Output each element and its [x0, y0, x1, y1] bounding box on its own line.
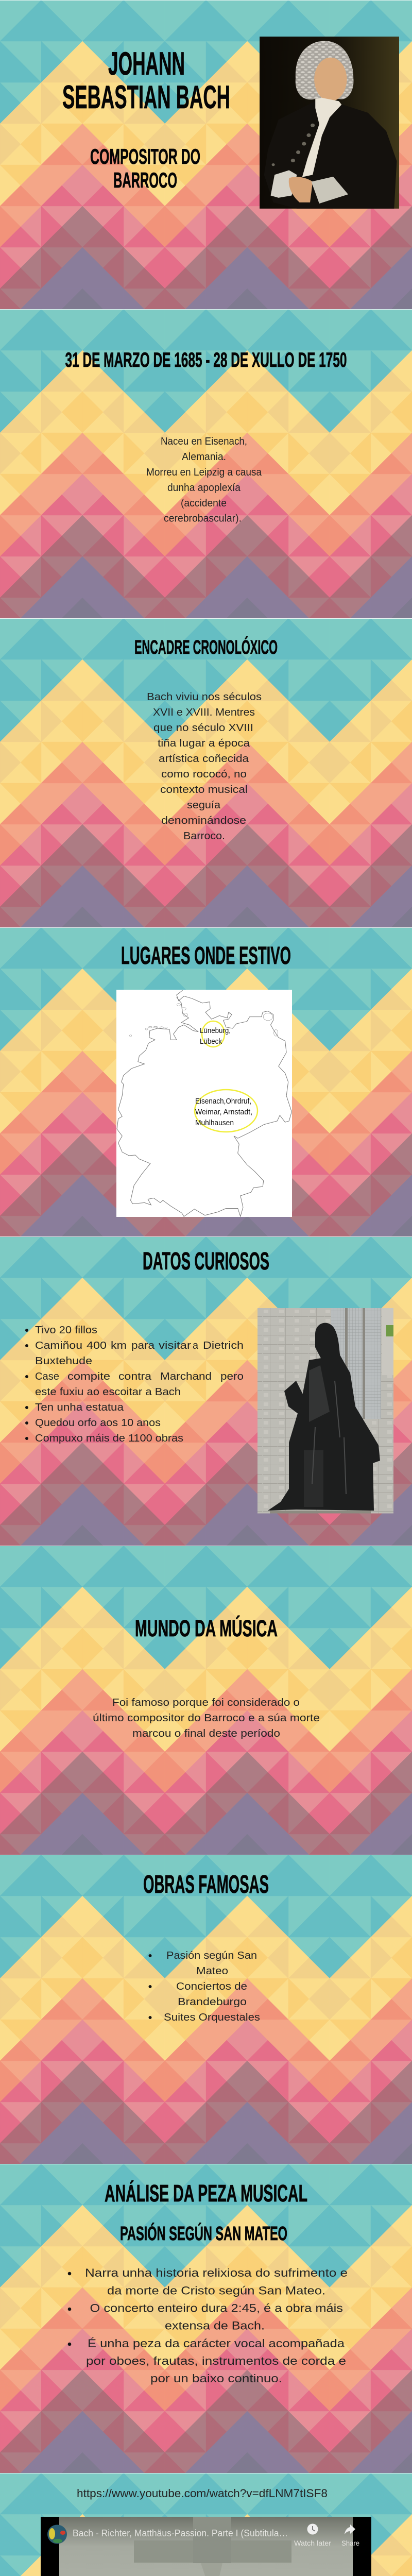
list: curious facts: km	[111, 1340, 127, 1351]
list: curious facts: Quedou orfo aos 10 anos	[35, 1417, 161, 1429]
list: famous works: Pasión según San	[166, 1950, 257, 1961]
list: analysis points: É unha peza da carácter vocal acompañada	[88, 2337, 345, 2350]
icon: share	[341, 2524, 359, 2547]
list: analysis points: extensa de Bach.	[165, 2319, 265, 2332]
list: famous works	[148, 1950, 260, 2023]
list: curious facts	[25, 1325, 244, 1444]
panel: analysis of the musical piece	[0, 2164, 412, 2473]
map of Germany: Lüneburg,	[200, 1026, 231, 1035]
icon: watch later	[294, 2523, 331, 2547]
text: birth and death: dunha apoplexía	[167, 482, 241, 494]
icon: watch later: Watch later	[294, 2539, 331, 2547]
text: chronological description: seguía	[187, 800, 221, 811]
text: birth and death: Naceu en Eisenach,	[161, 436, 247, 447]
icon: channel avatar	[47, 2524, 67, 2544]
video thumbnail	[41, 2517, 371, 2576]
heading: Johann Sebastian Bach: JOHANN	[108, 46, 185, 82]
text: chronological description: contexto musical	[160, 784, 248, 795]
list: analysis points: Narra unha historia relixiosa do sufrimento e	[85, 2266, 348, 2279]
list: curious facts: Case	[35, 1371, 59, 1382]
list: curious facts: compite	[67, 1371, 110, 1382]
list: curious facts: a	[193, 1340, 199, 1351]
panel: chronological framing	[0, 618, 412, 927]
list: curious facts: visitar	[159, 1340, 191, 1351]
map of Germany	[116, 990, 292, 1217]
list: analysis points: O concerto enteiro dura 2:45, é a obra máis	[90, 2302, 343, 2314]
list: curious facts: contra	[118, 1371, 152, 1382]
text: chronological description: tiña lugar a época	[158, 738, 250, 749]
subtitle: composer of the Baroque: COMPOSITOR DO	[90, 144, 200, 168]
text: birth and death: (accidente	[181, 498, 227, 509]
list: curious facts: Buxtehude	[35, 1355, 92, 1367]
text: video link: https://www.youtube.com/watch?v=dfLNM7tISF8	[77, 2487, 328, 2500]
list: curious facts: pero	[220, 1371, 244, 1382]
panel: world of music	[0, 1546, 412, 1855]
list: curious facts: este fuxiu ao escoitar a Bach	[35, 1386, 181, 1398]
map of Germany: Muhlhausen	[195, 1118, 234, 1127]
heading: Encadre cronolóxico: ENCADRE CRONOLÓXICO	[134, 636, 278, 658]
text: chronological description: Bach viviu nos séculos	[147, 691, 262, 703]
list: analysis points: por un baixo continuo.	[150, 2372, 282, 2385]
map of Germany: Eisenach,Ohrdruf,	[195, 1097, 251, 1106]
text: chronological description: artística coñecida	[159, 753, 249, 765]
list: curious facts: 400	[87, 1340, 107, 1351]
subtitle: composer of the Baroque: BARROCO	[113, 168, 177, 192]
list: curious facts: Ten unha estatua	[35, 1402, 124, 1413]
text: chronological description: XVII e XVIII. Mentres	[153, 707, 255, 718]
heading: Datos curiosos: DATOS CURIOSOS	[143, 1248, 269, 1275]
panel: famous works	[0, 1855, 412, 2164]
text: video title: Bach - Richter, Matthäus-Passion. Parte I (Subtitula…	[73, 2528, 288, 2538]
text: chronological description: Barroco.	[183, 831, 225, 842]
list: curious facts: para	[131, 1340, 155, 1351]
panel: title	[0, 0, 412, 309]
list: curious facts: Dietrich	[203, 1340, 244, 1351]
list: famous works: Conciertos de	[176, 1981, 247, 1992]
text: chronological description: como rococó, no	[161, 769, 247, 780]
map of Germany: Lübeck	[200, 1037, 222, 1046]
panel: dates	[0, 309, 412, 618]
heading: Obras famosas: OBRAS FAMOSAS	[143, 1871, 269, 1899]
list: analysis points: da morte de Cristo según San Mateo.	[107, 2284, 325, 2297]
panel: places he lived	[0, 927, 412, 1236]
icon: share: Share	[341, 2539, 359, 2547]
heading: Johann Sebastian Bach: SEBASTIAN BACH	[62, 79, 230, 115]
list: curious facts: Marchand	[160, 1371, 212, 1382]
text: birth and death	[146, 436, 262, 524]
subheading: Pasión según San Mateo: PASIÓN SEGÚN SAN MATEO	[120, 2222, 287, 2245]
text: last Baroque composer: marcou o final deste período	[132, 1728, 280, 1739]
panel: curious facts	[0, 1236, 412, 1546]
map of Germany: Weimar, Arnstadt,	[195, 1108, 252, 1116]
heading: Lugares onde estivo: LUGARES ONDE ESTIVO	[121, 942, 291, 970]
portrait of Bach	[260, 37, 399, 209]
text: birth and death: Morreu en Leipzig a causa	[146, 467, 262, 478]
list: analysis points: por oboes, frautas, instrumentos de corda e	[86, 2354, 346, 2367]
panel: Saint Matthew Passion video	[0, 2473, 412, 2576]
text: birth and death: Alemania.	[182, 451, 226, 463]
text: chronological description: que no século XVIII	[153, 722, 253, 734]
list: famous works: Mateo	[196, 1965, 228, 1977]
photo: statue of Bach	[258, 1308, 393, 1514]
heading: Mundo da música: MUNDO DA MÚSICA	[135, 1615, 278, 1641]
heading: Johann Sebastian Bach	[62, 46, 230, 115]
list: curious facts: Tivo 20 fillos	[35, 1325, 97, 1336]
text: last Baroque composer	[93, 1697, 320, 1739]
list: famous works: Brandeburgo	[178, 1996, 247, 2008]
text: birth and death: cerebrobascular).	[164, 513, 242, 524]
list: curious facts: Camiñou	[35, 1340, 82, 1351]
text: chronological description	[147, 691, 262, 842]
list: curious facts: Compuxo máis de 1100 obras	[35, 1433, 183, 1444]
list: famous works: Suites Orquestales	[164, 2012, 260, 2023]
list: analysis points	[68, 2266, 348, 2385]
text: chronological description: denominándose	[161, 815, 246, 826]
subtitle: composer of the Baroque	[90, 144, 200, 192]
text: last Baroque composer: Foi famoso porque foi considerado o	[112, 1697, 300, 1708]
text: last Baroque composer: último compositor do Barroco e a súa morte	[93, 1713, 320, 1724]
